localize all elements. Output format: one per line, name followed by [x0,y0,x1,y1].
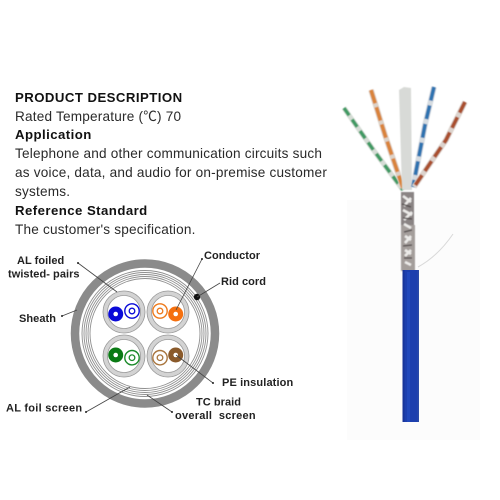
heading: application: Application [15,127,92,142]
rated temperature: Rated Temperature (℃) 70 [15,109,181,124]
leader end dots [61,258,214,413]
braid shield [401,192,415,271]
green conductors [108,348,139,365]
diagram labels: Rid cord [221,276,266,288]
brown conductors [153,348,183,365]
diagram labels: AL foiled [17,255,64,267]
diagram labels: Conductor [204,250,261,262]
diagram labels: twisted- pairs [8,269,80,281]
orange conductors [153,304,183,322]
diagram labels: TC braid [196,397,241,409]
application description: Telephone and other communication circuits such [15,146,322,161]
leader lines [62,259,220,412]
reference standard text: The customer's specification. [15,222,196,237]
application description [15,146,327,199]
screen rings [82,270,208,396]
product text block [15,90,327,237]
cable photo [344,87,480,440]
heading: product description: PRODUCT DESCRIPTION [15,90,183,105]
sheath ring [75,264,215,404]
diagram labels: PE insulation [222,377,294,389]
rid cord [194,294,200,300]
diagram labels: overall screen [175,410,256,422]
wire: orange pair [371,90,403,188]
filler: white centre spline [399,87,412,190]
wire: green pair [344,108,403,190]
diagram labels [6,250,294,422]
wire: blue pair [413,87,434,187]
wire: brown pair [414,102,465,187]
blue jacket [402,270,419,422]
pair shields [105,293,187,375]
diagram labels: AL foil screen [6,403,82,415]
thread: white drain [418,234,453,267]
blue conductors [108,304,139,322]
diagram labels: Sheath [19,313,56,325]
application description: as voice, data, and audio for on-premise customer [15,165,327,180]
application description: systems. [15,184,70,199]
cross-section diagram [6,250,294,422]
heading: reference standard: Reference Standard [15,203,148,218]
